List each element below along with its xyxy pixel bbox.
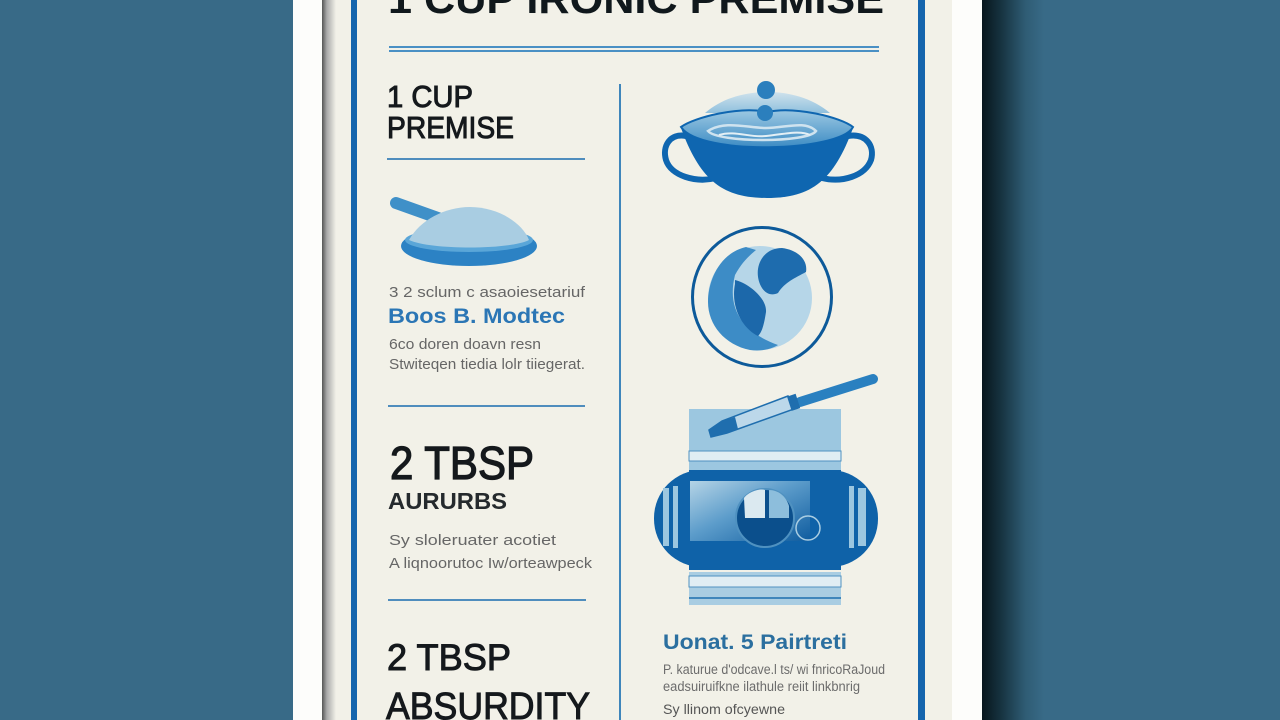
icon: scoop — [396, 203, 537, 266]
section: usage note — [663, 631, 885, 717]
poster sheet — [322, 0, 952, 720]
section: 1 cup premise: PREMISE — [387, 110, 514, 145]
section: 1 cup premise: 6co doren doavn resn — [389, 336, 541, 353]
section: 2 tbsp aururbs: AURURBS — [388, 488, 507, 514]
section: 2 tbsp aururbs: Sy sloleruater acotiet — [389, 532, 557, 549]
icon: pen — [709, 379, 873, 437]
column divider — [619, 84, 621, 720]
section: 2 tbsp aururbs: 2 TBSP — [390, 437, 534, 489]
poster mat — [293, 0, 982, 720]
section: 1 cup premise: 3 2 sclum c asaoiesetariuf — [389, 284, 586, 301]
section: 2 tbsp absurdity: 2 TBSP — [387, 637, 511, 678]
section: usage note: Sy llinom ofcyewne — [663, 701, 785, 717]
section: usage note: eadsuiruifkne ilathule reiit linkbnrig — [663, 679, 860, 694]
section: usage note: Uonat. 5 Pairtreti — [663, 631, 847, 654]
section: 1 cup premise — [387, 79, 586, 373]
section: 2 tbsp absurdity — [386, 599, 590, 720]
poster frame — [351, 0, 925, 720]
section: 1 cup premise: Boos B. Modtec — [388, 305, 565, 328]
section: 2 tbsp aururbs — [388, 405, 593, 572]
poster shadow — [982, 0, 1044, 720]
section: 2 tbsp aururbs: A liqnoorutoc Iw/orteawpeck — [389, 555, 593, 572]
section: 1 cup premise: Stwiteqen tiedia lolr tiiegerat. — [389, 356, 585, 373]
icon: blueprint machine — [654, 409, 878, 605]
icon: plate — [692, 228, 832, 366]
section: usage note: P. katurue d'odcave.l ts/ wi fnricoRaJoud — [663, 662, 885, 677]
section: 1 cup premise: 1 CUP — [387, 79, 473, 114]
icon: soup bowl — [665, 81, 872, 198]
